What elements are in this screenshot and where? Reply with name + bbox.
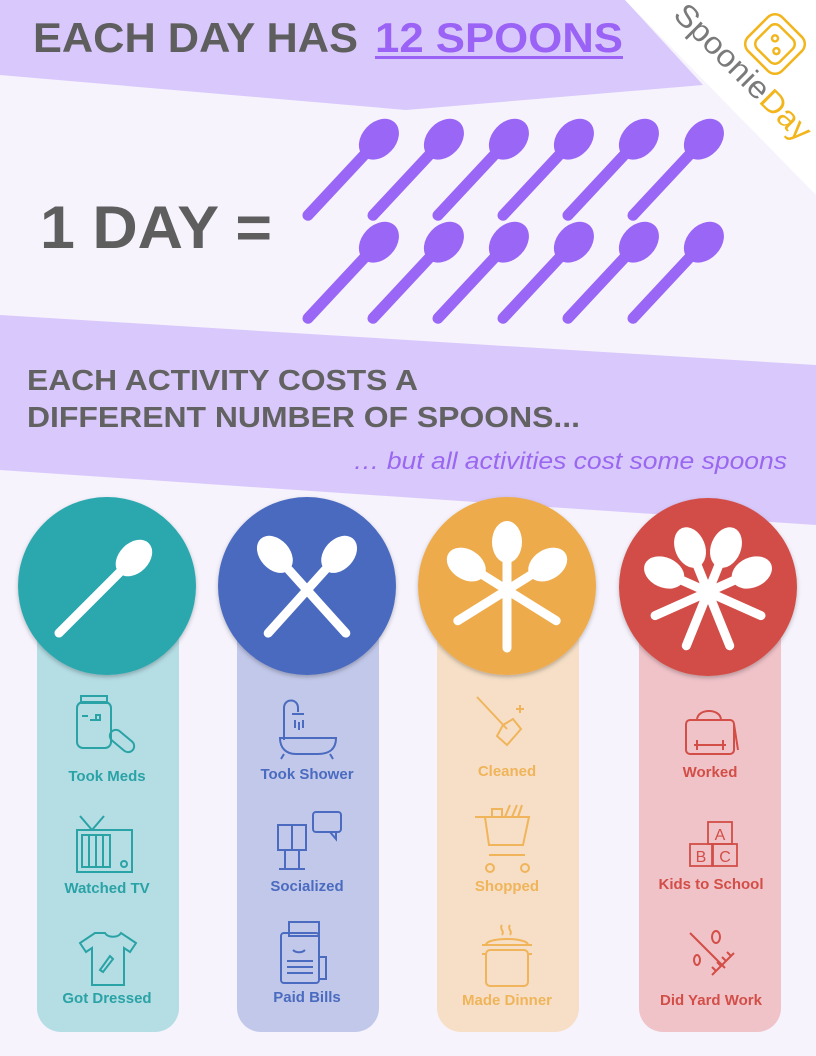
- 1 day equals: 1 DAY =: [40, 194, 272, 261]
- icon: shower: [280, 700, 336, 759]
- icon: tv: [77, 816, 132, 872]
- panel: 2 spoons: Socialized: [270, 878, 344, 895]
- subtitle: … but all activities cost some spoons: [353, 448, 787, 475]
- title: EACH DAY HAS: [33, 14, 358, 61]
- icon: ABC blocks: A: [715, 827, 726, 844]
- icon: ABC blocks: C: [719, 849, 731, 866]
- icon: rake: [690, 931, 734, 975]
- top band: [0, 0, 703, 110]
- panel: 3 spoons: Shopped: [475, 878, 539, 895]
- icon: meds: [77, 696, 137, 755]
- section heading: EACH ACTIVITY COSTS A: [27, 365, 418, 397]
- section heading: DIFFERENT NUMBER OF SPOONS...: [27, 402, 580, 434]
- panel: 3 spoons: [418, 497, 596, 1032]
- logo background: [625, 0, 816, 195]
- icon: broom: [477, 697, 524, 745]
- middle band: [0, 315, 816, 525]
- icon: bag: [686, 711, 738, 754]
- icon: pot: [482, 925, 532, 986]
- logo: SpoonieDay: [667, 0, 816, 149]
- panel: 3 spoons: Cleaned: [478, 763, 536, 780]
- title underline: [375, 56, 623, 59]
- title: 12 SPOONS: [375, 14, 623, 61]
- icon: ABC blocks: [690, 822, 737, 866]
- panel: 4 spoons: Kids to School: [658, 876, 764, 893]
- panel: 1 spoon: Took Meds: [68, 768, 146, 785]
- panel: 1 spoon: Watched TV: [64, 880, 150, 897]
- spoons grid: 12 spoons: [296, 111, 732, 330]
- icon: ABC blocks: B: [696, 849, 706, 866]
- panel: 3 spoons: Made Dinner: [462, 992, 552, 1009]
- panel: 4 spoons: Did Yard Work: [660, 992, 763, 1009]
- icon: socialize: [278, 812, 341, 869]
- icon: bills: [281, 922, 326, 983]
- panel: 2 spoons: [218, 497, 396, 1032]
- icon: cart: [475, 805, 529, 872]
- panel: 2 spoons: Paid Bills: [273, 989, 341, 1006]
- panel: 1 spoon: [18, 497, 196, 1032]
- panel: 1 spoon: Got Dressed: [62, 990, 152, 1007]
- panel: 2 spoons: Took Shower: [260, 766, 354, 783]
- panel: 4 spoons: Worked: [683, 764, 737, 781]
- panel: 4 spoons: [619, 498, 797, 1032]
- icon: shirt: [80, 933, 136, 985]
